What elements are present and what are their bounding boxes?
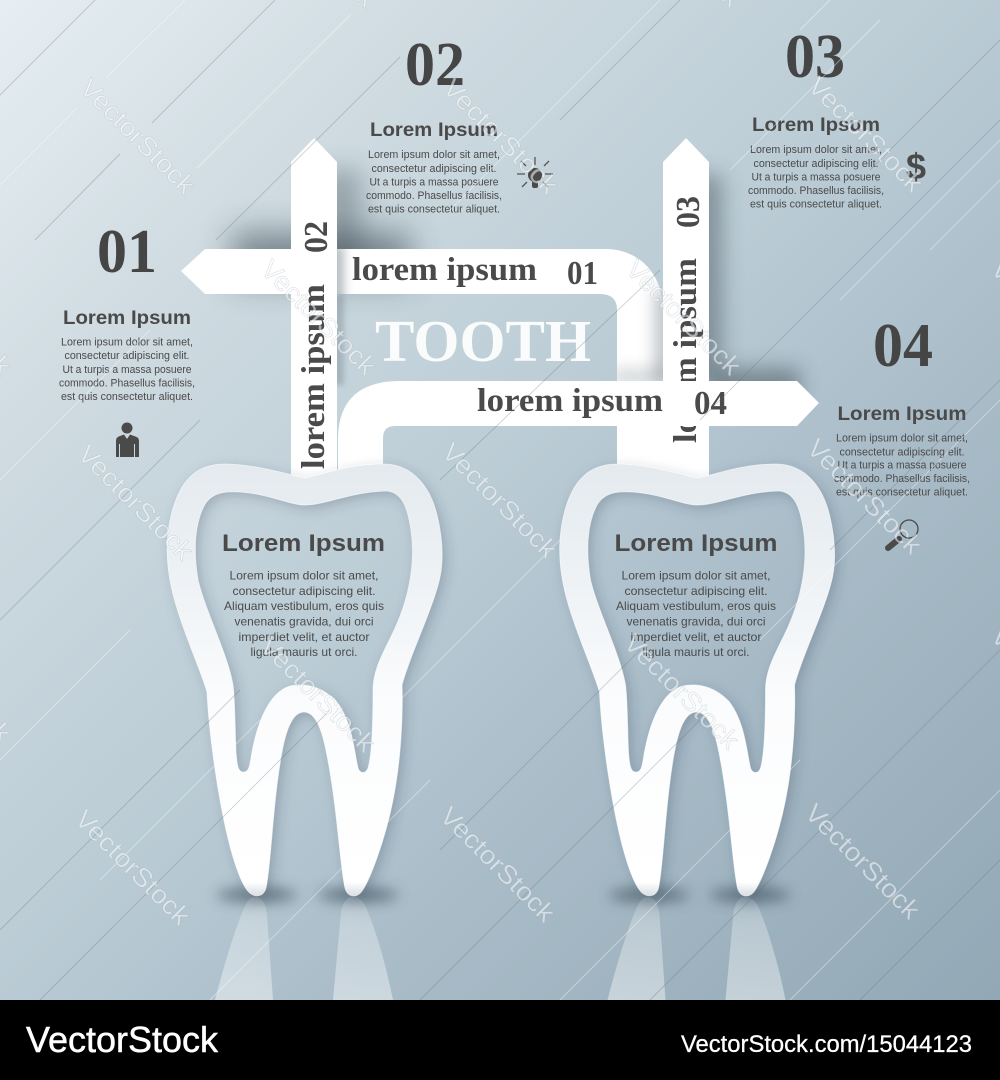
ribbon 01 xyxy=(181,245,675,480)
watermarks: VectorStock xyxy=(801,433,929,561)
body 02: Ut a turpis a massa posuere xyxy=(370,176,498,188)
ribbon 04 xyxy=(338,381,819,480)
body 02: commodo. Phasellus facilisis, xyxy=(366,190,502,202)
watermarks: VectorStock xyxy=(620,254,748,382)
body 02: consectetur adipiscing elit. xyxy=(372,163,496,175)
number 04: 04 xyxy=(873,312,933,380)
tooth left body: venenatis gravida, dui orci xyxy=(234,614,374,628)
heading 01: Lorem Ipsum xyxy=(63,308,191,329)
body 03 xyxy=(748,144,884,210)
tooth reflections xyxy=(215,897,786,1000)
icon: light bulb xyxy=(517,157,553,188)
watermarks: VectorStock xyxy=(436,437,564,565)
body 02: Lorem ipsum dolor sit amet, xyxy=(368,149,500,161)
tooth left body: Aliquam vestibulum, eros quis xyxy=(224,599,384,613)
footer brand: VectorStock xyxy=(26,1019,219,1060)
ribbon 04 label: lorem ipsum xyxy=(477,383,663,419)
body 01: est quis consectetur aliquet. xyxy=(61,391,193,403)
body 01: Lorem ipsum dolor sit amet, xyxy=(61,336,193,348)
tooth right body: venenatis gravida, dui orci xyxy=(626,614,766,628)
watermarks: VectorStock xyxy=(618,628,746,756)
watermarks: VectorStock xyxy=(255,254,383,382)
panel: step 03 xyxy=(748,23,926,210)
body 03: Lorem ipsum dolor sit amet, xyxy=(750,144,882,156)
watermarks: VectorStock xyxy=(254,631,382,759)
arrow 02 xyxy=(291,138,337,480)
panel: step 04 xyxy=(834,312,970,548)
watermarks: VectorStock xyxy=(74,73,202,201)
body 01 xyxy=(59,336,195,403)
tooth left xyxy=(167,464,442,896)
body 03: commodo. Phasellus facilisis, xyxy=(748,185,884,197)
body 04: Lorem ipsum dolor sit amet, xyxy=(836,432,968,444)
heading 02: Lorem Ipsum xyxy=(370,120,498,141)
watermarks: VectorStock xyxy=(802,71,930,199)
tooth right body xyxy=(616,568,776,659)
footer image id: VectorStock.com/15044123 xyxy=(681,1031,972,1058)
body 02 xyxy=(366,149,502,216)
tooth left heading: Lorem Ipsum xyxy=(222,530,385,557)
watermarks: VectorStock xyxy=(69,804,197,932)
ribbon 01 number: 01 xyxy=(567,255,598,292)
body 02: est quis consectetur aliquet. xyxy=(368,204,500,216)
tooth right body: ligula mauris ut orci. xyxy=(642,645,750,659)
body 04: consectetur adipiscing elit. xyxy=(840,446,964,458)
tooth right xyxy=(560,464,835,896)
tooth left body: ligula mauris ut orci. xyxy=(250,645,358,659)
arrow 02 shadow xyxy=(332,295,344,385)
arrow 03 label: lorem ipsum xyxy=(668,258,704,443)
tooth left body: imperdiet velit, et auctor xyxy=(238,630,370,644)
heading 03: Lorem Ipsum xyxy=(752,115,880,136)
tooth right text xyxy=(614,530,778,659)
ground shadows xyxy=(217,888,790,902)
tooth right body: Aliquam vestibulum, eros quis xyxy=(616,599,776,613)
body 01: Ut a turpis a massa posuere xyxy=(62,364,192,376)
panel: step 01 xyxy=(59,218,195,457)
body 04: commodo. Phasellus facilisis, xyxy=(834,473,970,485)
icon: magnifier xyxy=(888,520,918,548)
body 03: Ut a turpis a massa posuere xyxy=(752,172,880,184)
watermarks: VectorStock xyxy=(437,73,565,201)
arrow 03 number: 03 xyxy=(670,196,707,228)
tooth right body: consectetur adipiscing elit. xyxy=(624,584,768,598)
number 02: 02 xyxy=(405,31,465,99)
body 04 xyxy=(834,432,970,498)
body 01: consectetur adipiscing elit. xyxy=(64,350,190,362)
ribbon shadows xyxy=(232,170,800,403)
body 03: consectetur adipiscing elit. xyxy=(754,158,878,170)
body 03: est quis consectetur aliquet. xyxy=(750,198,882,210)
body 04: Ut a turpis a massa posuere xyxy=(838,460,966,472)
number 03: 03 xyxy=(785,23,845,91)
tooth left body: consectetur adipiscing elit. xyxy=(232,584,376,598)
panel: step 02 xyxy=(366,31,553,216)
arrow 02 number: 02 xyxy=(298,221,335,253)
tooth right body: imperdiet velit, et auctor xyxy=(630,630,762,644)
watermarks: VectorStock xyxy=(799,798,927,926)
watermarks: VectorStock xyxy=(434,801,562,929)
body 04: est quis consectetur aliquet. xyxy=(836,486,968,498)
icon: businessman xyxy=(116,422,139,457)
tooth right heading: Lorem Ipsum xyxy=(614,530,778,557)
arrow 03 xyxy=(663,138,709,480)
icon: dollar: $ xyxy=(906,146,926,187)
ribbon 01 label: lorem ipsum xyxy=(352,252,537,288)
tooth right body: Lorem ipsum dolor sit amet, xyxy=(622,568,770,582)
body 01: commodo. Phasellus facilisis, xyxy=(59,378,195,390)
heading 04: Lorem Ipsum xyxy=(838,404,966,425)
arrow 02 label: lorem ipsum xyxy=(296,284,332,469)
tooth left body: Lorem ipsum dolor sit amet, xyxy=(230,568,378,582)
footer bar xyxy=(0,1000,1000,1080)
title: TOOTH xyxy=(375,308,591,374)
ribbon 04 number: 04 xyxy=(694,385,727,422)
watermarks: VectorStock xyxy=(72,439,200,567)
tooth left text xyxy=(222,530,385,659)
tooth left body xyxy=(224,568,384,659)
number 01: 01 xyxy=(97,218,157,286)
